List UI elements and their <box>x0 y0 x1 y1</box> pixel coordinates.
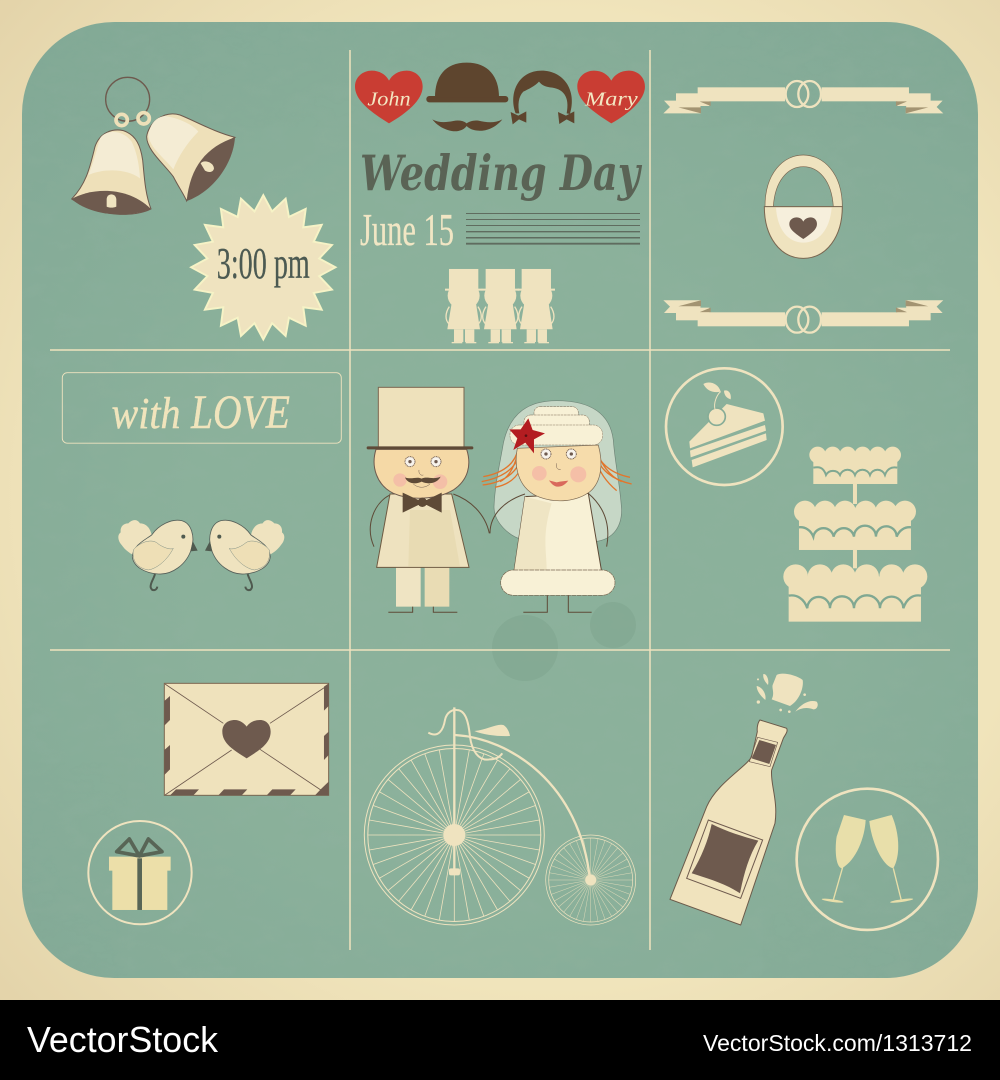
icon: popping cork and splashes <box>757 674 818 713</box>
watermark: VectorStock logo: VectorStock <box>27 1019 219 1060</box>
decorative lines block <box>466 214 640 244</box>
icon: Mary heart: Mary <box>584 88 638 110</box>
panel: with love and birds <box>62 373 341 590</box>
watermark: image URL: VectorStock.com/1313712 <box>703 1030 972 1056</box>
panel: bells and time <box>72 77 335 339</box>
icon: right love bird <box>205 520 284 590</box>
panel: champagne <box>670 674 938 930</box>
heading: Wedding Day: Wedding Day <box>360 144 643 202</box>
panel: cake <box>666 368 927 622</box>
panel: title <box>355 63 645 343</box>
icon: John heart <box>355 71 423 123</box>
icon: gift in circle <box>88 821 192 924</box>
panel: envelope and gift <box>88 683 329 924</box>
footer bar <box>0 1000 1000 1080</box>
label: with LOVE box <box>62 373 341 443</box>
label: with LOVE box: with <box>112 389 180 438</box>
groom <box>367 387 489 612</box>
panel: ribbons and purse <box>663 81 943 333</box>
icon: champagne bottle <box>670 720 787 925</box>
panel: penny-farthing bicycle <box>364 707 636 925</box>
icon: bowler hat and moustache <box>426 63 508 131</box>
icon: John heart: John <box>367 88 411 110</box>
icon: purse with heart <box>764 155 842 258</box>
icon: wedding bells <box>72 77 235 214</box>
icon: girl hair with bows <box>511 71 574 124</box>
icon: bottom ribbon with rings <box>663 300 943 333</box>
large wheel <box>364 745 544 925</box>
icon: three figures <box>445 269 555 343</box>
icon: cake slice in circle <box>666 368 783 485</box>
icon: champagne glasses in circle <box>797 789 938 930</box>
date: June 15: June 15 <box>360 204 454 255</box>
label: with LOVE box: LOVE <box>190 386 290 439</box>
icon: airmail envelope <box>164 683 329 795</box>
icon: three tier wedding cake <box>783 447 927 622</box>
bride <box>482 401 632 612</box>
icon: left love bird <box>118 520 198 590</box>
panel: bride and groom <box>367 387 632 612</box>
small wheel <box>546 835 636 925</box>
icon: Mary heart <box>577 71 645 123</box>
starburst: 3:00 pm: 3:00 pm <box>217 239 310 288</box>
starburst: 3:00 pm <box>191 195 335 339</box>
icon: top ribbon with rings <box>663 81 943 113</box>
frame, handlebar and seat <box>428 707 590 880</box>
